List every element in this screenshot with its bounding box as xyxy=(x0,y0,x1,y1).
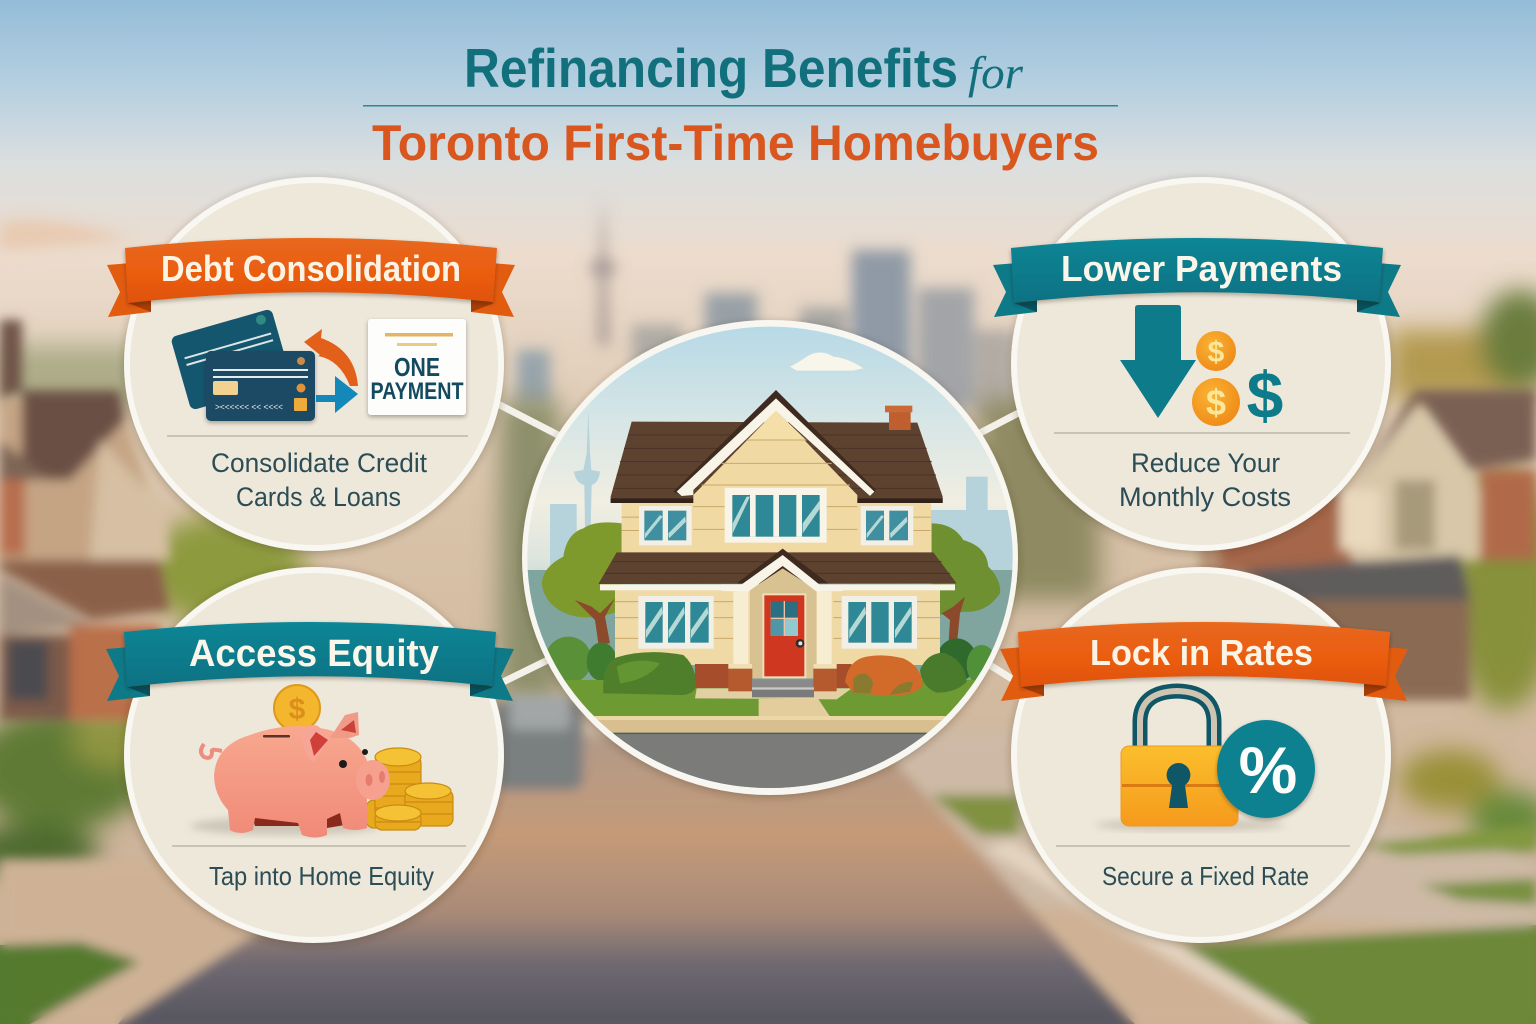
heading: Access Equity xyxy=(189,633,439,675)
description: Reduce Your xyxy=(1131,448,1280,478)
heading: Debt Consolidation xyxy=(161,248,461,289)
icon: piggy bank with coins xyxy=(190,685,453,838)
right tree xyxy=(932,523,1000,615)
icon: down arrow with coins: $ xyxy=(1247,358,1283,432)
panel: access equity xyxy=(106,570,514,940)
card circle xyxy=(127,570,501,940)
coin stacks xyxy=(366,748,453,830)
lower windows xyxy=(638,596,917,649)
panel: central house illustration xyxy=(520,320,1020,800)
icon: credit cards to one payment xyxy=(170,308,466,421)
panel: lock in rates xyxy=(1000,570,1408,940)
upper windows xyxy=(639,488,913,545)
left tree xyxy=(542,522,622,617)
heading: Lower Payments xyxy=(1061,248,1342,289)
icon: padlock with percent badge: % xyxy=(1239,733,1297,807)
chimney xyxy=(889,412,911,430)
upper roof xyxy=(611,422,943,503)
heading: Lock in Rates xyxy=(1090,632,1313,673)
icon: down arrow with coins: $ xyxy=(1208,336,1225,369)
lower wall xyxy=(615,588,940,665)
description: Consolidate Credit xyxy=(211,448,427,478)
panel: lower payments xyxy=(993,180,1401,548)
ribbon xyxy=(106,622,514,701)
description: Secure a Fixed Rate xyxy=(1102,861,1309,891)
ribbon xyxy=(107,238,515,317)
title word: for: for xyxy=(968,47,1024,98)
icon: down arrow with coins: $ xyxy=(1206,382,1226,423)
title xyxy=(363,37,1118,171)
panel: debt consolidation xyxy=(107,180,515,548)
lower roof xyxy=(598,552,957,584)
door xyxy=(762,593,806,678)
connectors between centre and cards xyxy=(498,404,1028,684)
gable wall xyxy=(693,416,858,503)
title line 2: Toronto First-Time Homebuyers xyxy=(372,115,1099,171)
description: Monthly Costs xyxy=(1119,482,1291,512)
ribbon xyxy=(993,238,1401,317)
card circle xyxy=(1014,570,1388,940)
ribbon xyxy=(1000,622,1408,701)
icon: credit cards to one payment: PAYMENT xyxy=(370,378,464,405)
icon: piggy bank with coins: $ xyxy=(289,693,306,726)
icon: padlock with percent badge xyxy=(1095,691,1315,831)
title line 1: Refinancing Benefits xyxy=(464,37,958,99)
description: Tap into Home Equity xyxy=(209,861,434,891)
gable trim xyxy=(673,390,876,497)
upper wall xyxy=(622,502,931,553)
lower brick xyxy=(695,664,732,688)
card circle xyxy=(1014,180,1388,548)
icon: down arrow with coins xyxy=(1120,305,1283,432)
title rule xyxy=(363,105,1118,106)
shrubs xyxy=(603,652,696,695)
icon: credit cards to one payment: ><<<<<< << <<<< xyxy=(215,402,283,412)
ground xyxy=(553,680,987,717)
description: Cards & Loans xyxy=(236,482,401,512)
pig xyxy=(201,744,222,758)
icon: credit cards to one payment: ONE xyxy=(394,352,440,382)
porch xyxy=(737,549,828,583)
card circle xyxy=(127,180,501,548)
